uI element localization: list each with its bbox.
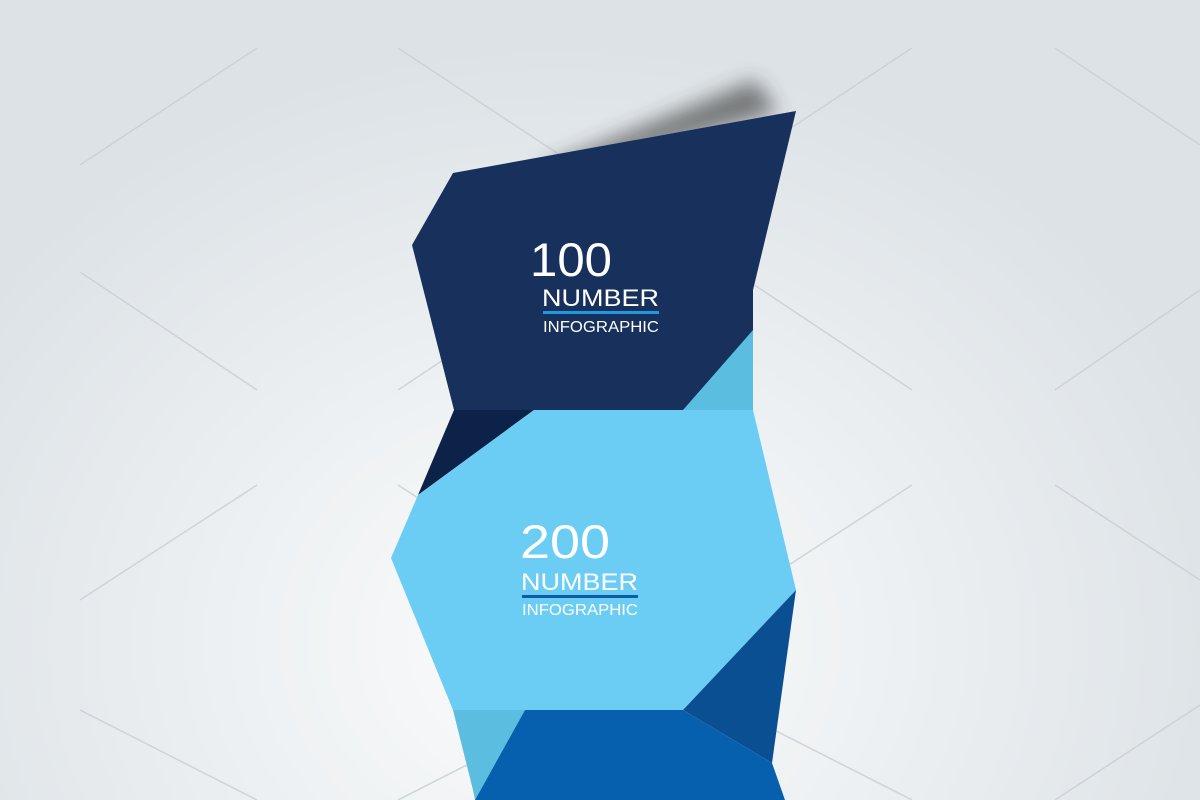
text block: 100: NUMBER [542, 285, 659, 312]
light teal fold triangle bottom [453, 710, 525, 800]
dark navy fold triangle [418, 410, 534, 495]
dark blue fold triangle right [683, 590, 796, 763]
panel: bottom blue [475, 710, 785, 800]
panel: middle light blue [391, 410, 796, 710]
text block: 100: 100 [530, 233, 612, 286]
text block: 200: NUMBER [521, 569, 638, 596]
light teal fold triangle top [683, 330, 753, 410]
shadow behind top panel [540, 80, 778, 176]
text block: 200: 200 [520, 515, 610, 568]
text block: 100: INFOGRAPHIC [543, 319, 659, 336]
text block: 200: INFOGRAPHIC [522, 602, 638, 619]
text block: 100 [530, 233, 659, 336]
text block: 200 [520, 515, 638, 619]
panel: top navy [412, 111, 796, 410]
